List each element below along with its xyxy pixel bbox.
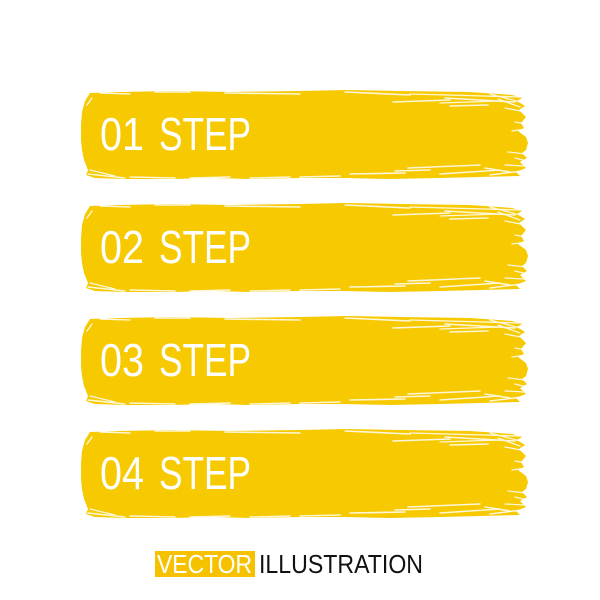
label: 01 STEP: STEP <box>159 108 251 160</box>
label: 04 STEP: STEP <box>159 447 251 499</box>
label: 03 STEP: 03 <box>100 334 144 386</box>
panel: step 3 <box>81 316 528 405</box>
label: 03 STEP <box>100 334 251 386</box>
label: 01 STEP <box>100 108 251 160</box>
panel: step 1 <box>81 90 528 179</box>
footer word: VECTOR: VECTOR <box>157 549 252 579</box>
brush bar 4 <box>81 429 528 518</box>
footer word: ILLUSTRATION: ILLUSTRATION <box>259 549 423 579</box>
footer highlight box <box>155 551 255 577</box>
brush bar 3 <box>81 316 528 405</box>
panel: step 2 <box>81 203 528 292</box>
brush bar 2 <box>81 203 528 292</box>
label: 04 STEP: 04 <box>100 447 144 499</box>
brush bar 1 <box>81 90 528 179</box>
label: 02 STEP: STEP <box>159 221 251 273</box>
label: 02 STEP: 02 <box>100 221 144 273</box>
label: 02 STEP <box>100 221 251 273</box>
label: 04 STEP <box>100 447 251 499</box>
footer: vector illustration <box>155 549 423 579</box>
panel: step 4 <box>81 429 528 518</box>
label: 01 STEP: 01 <box>100 108 144 160</box>
label: 03 STEP: STEP <box>159 334 251 386</box>
